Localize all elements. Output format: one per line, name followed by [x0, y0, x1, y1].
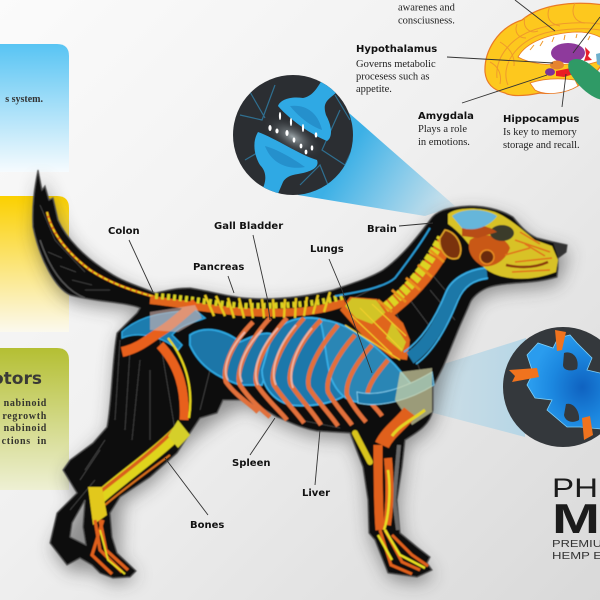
text: hypothalamus: appetite. [356, 84, 392, 95]
text: hippocampus: Is key to memory [503, 127, 578, 138]
front leg bones [355, 410, 428, 574]
white matter [518, 32, 600, 93]
dog silhouette [33, 170, 567, 578]
label: bones: Bones [190, 520, 224, 531]
label: liver [302, 430, 330, 499]
skull [440, 208, 558, 279]
label: bones [165, 458, 224, 531]
neck vertebrae rings [440, 230, 461, 259]
text: amygdala: Amygdala [418, 111, 474, 122]
blue receptor cell [527, 335, 600, 430]
callout beam: synapse [298, 113, 455, 216]
icon: synapse circle [233, 75, 353, 196]
lower synapse bulb [254, 132, 318, 196]
panel body text: regrowth [2, 411, 47, 422]
callout beam: receptor [426, 338, 526, 437]
label: colon: Colon [108, 226, 140, 237]
cerebrum [485, 3, 600, 96]
label: pancreas [193, 262, 244, 293]
amygdala [545, 68, 555, 76]
hypothalamus [550, 60, 564, 70]
cervical spine [378, 238, 447, 312]
blue intestines [190, 330, 275, 385]
orange binding tab top [555, 330, 566, 351]
cranium brain blue [452, 210, 497, 229]
text: awareness: consciusness. [398, 16, 455, 26]
panel: blue receptor system card [0, 44, 69, 172]
blue organs [262, 318, 412, 406]
icon: receptor circle [503, 327, 600, 447]
logo: HEMP E [552, 551, 600, 562]
fur scratches [40, 205, 455, 530]
panel body text: nabinoid [4, 423, 47, 434]
dog shadow [35, 176, 569, 584]
dog illustration [33, 170, 567, 578]
text: hippocampus [503, 114, 580, 151]
dark pocket lower [564, 404, 579, 422]
text: amygdala: in emotions. [418, 137, 470, 148]
text: hypothalamus: procesess such as [356, 72, 429, 82]
text: awareness: awarenes and [398, 2, 456, 14]
label: lungs [310, 244, 372, 373]
orange binding tab left [509, 368, 539, 382]
label: gall bladder [214, 221, 283, 320]
upper synapse bulb [278, 80, 337, 141]
text: hypothalamus [356, 44, 437, 95]
neck trachea blue [335, 228, 488, 364]
thalamus [551, 43, 585, 63]
label: spleen: Spleen [232, 458, 270, 469]
label: liver: Liver [302, 488, 330, 499]
text: hippocampus: storage and recall. [503, 140, 580, 151]
panel body text [2, 398, 47, 447]
synaptic cleft glow [271, 121, 316, 153]
brain leader lines [447, 0, 600, 107]
text: amygdala: Plays a role [418, 124, 467, 135]
panel body text: ctions in [2, 436, 47, 447]
white matter ticks [530, 34, 590, 50]
hippocampus [556, 67, 577, 77]
hind leg bones [88, 420, 190, 574]
label: lungs: Lungs [310, 244, 344, 255]
logo [552, 473, 600, 562]
logo: PREMIU [552, 539, 600, 550]
rib highlights [226, 325, 312, 388]
nose [553, 242, 567, 258]
text: amygdala [418, 111, 474, 148]
cerebellum [568, 59, 600, 100]
logo: M [552, 495, 600, 542]
text: awareness [398, 2, 456, 26]
orange binding tab bottom [582, 416, 593, 440]
label: pancreas: Pancreas [193, 262, 244, 273]
ribs [225, 318, 388, 426]
cortex folds [490, 3, 600, 85]
tail vertebrae [47, 212, 155, 297]
panel: yellow card [0, 196, 69, 332]
trachea lower sweep [357, 372, 434, 404]
panel text: nervous system: s system. [5, 94, 43, 105]
brain diagram [485, 3, 600, 100]
label: colon [108, 226, 153, 292]
label: gall bladder: Gall Bladder [214, 221, 283, 232]
spine [150, 292, 345, 318]
faint nerve network [240, 85, 352, 190]
text: hypothalamus: Hypothalamus [356, 44, 437, 55]
scapula and chest muscle [340, 297, 410, 360]
label: spleen [232, 418, 275, 469]
logo: PH [552, 473, 598, 503]
translucent beam over shoulder [395, 368, 432, 425]
pelvis and femur [122, 303, 202, 420]
text: hypothalamus: Governs metabolic [356, 59, 436, 70]
text: hippocampus: Hippocampus [503, 114, 579, 125]
panel body text: nabinoid [4, 398, 47, 409]
dark pocket upper [563, 352, 578, 370]
label: brain: Brain [367, 224, 397, 235]
panel: olive receptors card [0, 348, 69, 490]
ventricle [596, 52, 600, 68]
midbrain red detail [584, 47, 592, 61]
label: brain [367, 223, 433, 235]
blue colon [122, 310, 205, 350]
neurotransmitter dots [268, 112, 317, 154]
